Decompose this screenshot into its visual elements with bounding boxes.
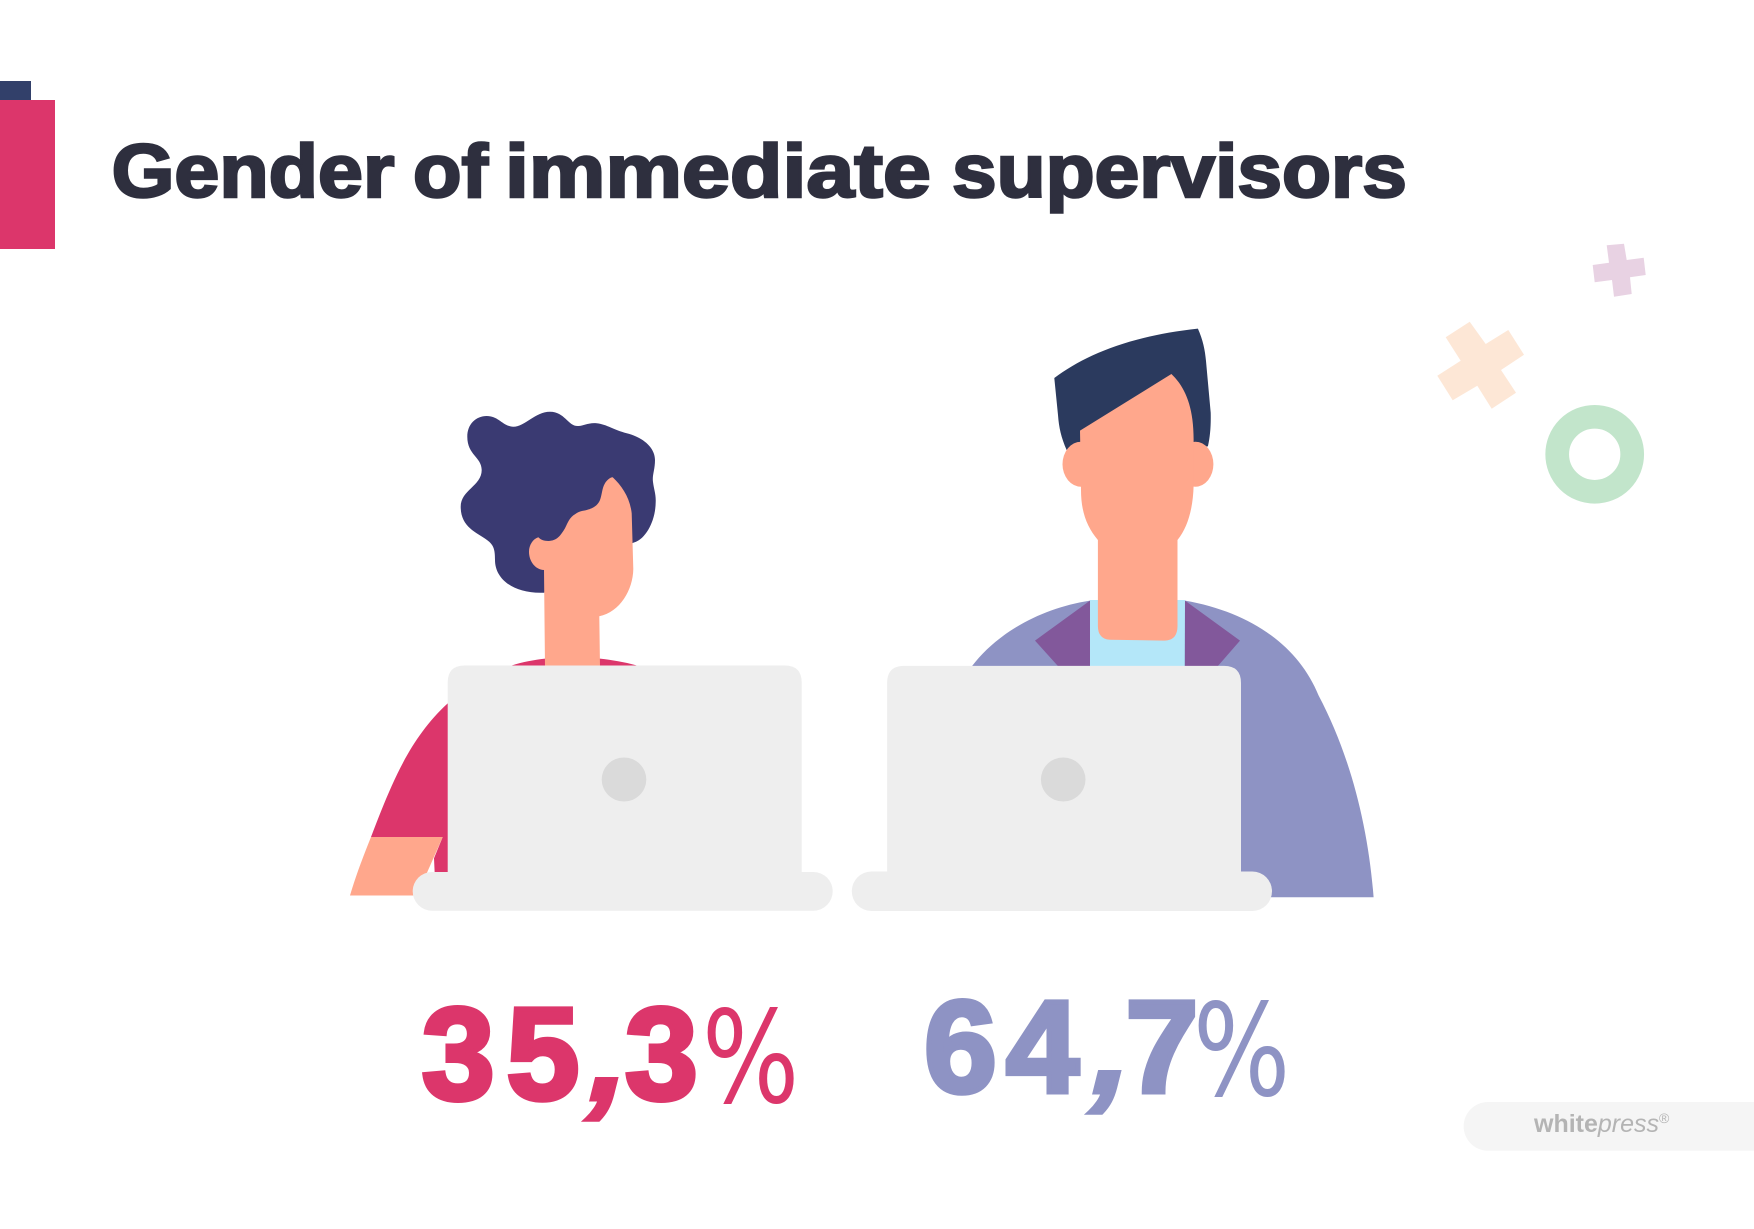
header accent block xyxy=(0,81,55,249)
man: shirt xyxy=(1090,600,1185,666)
man: ears xyxy=(1062,442,1213,487)
man: hair xyxy=(1054,329,1211,450)
footer logo pill xyxy=(1464,1102,1754,1151)
title: immediate xyxy=(505,130,931,214)
decorative shape: peach plus xyxy=(1437,322,1524,409)
statistic: men 64,7%: 64 xyxy=(924,973,1079,1120)
logo text: whitepress xyxy=(1534,1110,1659,1138)
man: laptop base xyxy=(852,872,1272,911)
statistic: men 64,7%: , xyxy=(1079,975,1152,1121)
man figure with laptop xyxy=(852,329,1374,911)
statistic: women 35,3%: % xyxy=(702,984,799,1133)
statistic: men 64,7%: 7 xyxy=(1126,973,1198,1120)
woman: pink shirt xyxy=(371,659,640,880)
decorative shape: green ring xyxy=(1557,417,1632,492)
woman: laptop base xyxy=(413,872,833,911)
statistic: men 64,7%: % xyxy=(1193,977,1290,1126)
logo text: ® xyxy=(1659,1110,1670,1126)
title xyxy=(112,129,1407,214)
title: of xyxy=(413,130,488,214)
woman: laptop logo xyxy=(602,758,646,802)
man: jacket xyxy=(972,601,1374,897)
woman: hair xyxy=(461,412,656,593)
statistic: women 35,3%: , xyxy=(576,982,649,1128)
man: left lapel xyxy=(1035,601,1090,666)
woman: laptop screen xyxy=(448,666,802,880)
man: face and neck xyxy=(1080,374,1194,641)
statistic: women 35,3%: 3 xyxy=(625,980,698,1127)
title: Gender xyxy=(112,129,394,213)
title: supervisors xyxy=(952,130,1407,213)
statistic: women 35,3%: 35 xyxy=(422,980,579,1127)
woman: face and neck xyxy=(529,477,633,667)
woman: forearm xyxy=(350,837,443,896)
woman figure with laptop xyxy=(350,412,833,911)
statistic: men 64,7% xyxy=(924,973,1290,1126)
man: right lapel xyxy=(1185,601,1240,666)
man: laptop screen xyxy=(887,666,1241,880)
decorative shape: pink plus xyxy=(1593,244,1646,297)
man: laptop logo xyxy=(1041,758,1085,802)
statistic: women 35,3% xyxy=(422,980,799,1133)
